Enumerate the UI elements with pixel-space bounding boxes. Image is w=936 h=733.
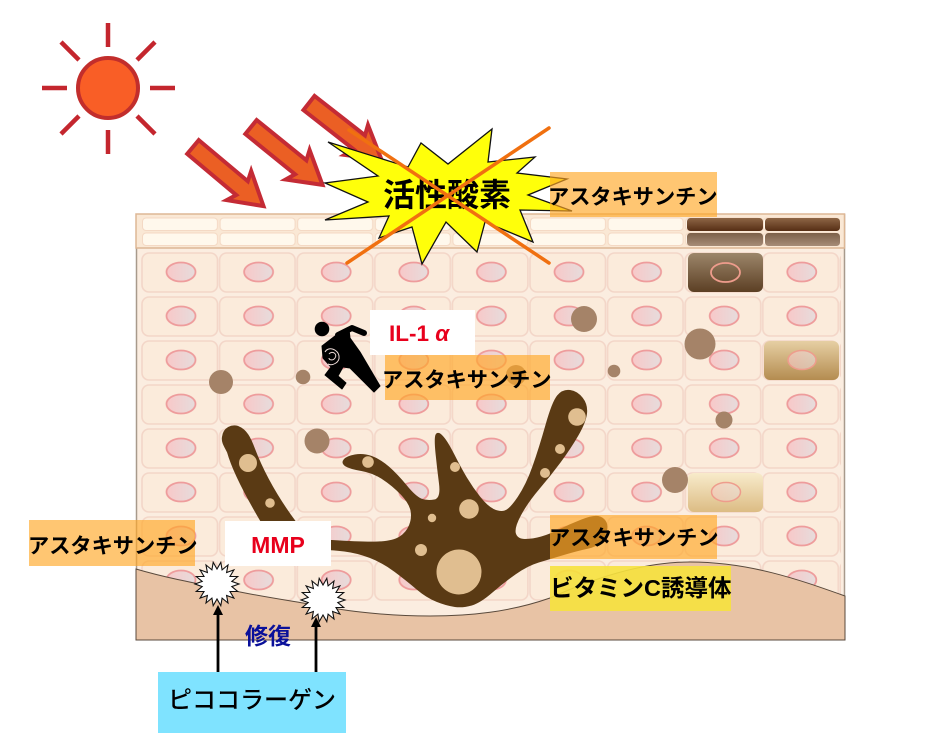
cell grid (141, 252, 841, 604)
label: astaxanthin (right): アスタキサンチン (549, 526, 719, 550)
melanin granules (239, 408, 586, 594)
heading: reactive oxygen: 活性酸素 (383, 177, 511, 213)
label: vitamin C derivative: ビタミンC誘導体 (550, 575, 732, 601)
box: picocollagen (158, 672, 346, 733)
melanocyte (223, 391, 606, 606)
label: astaxanthin (top): アスタキサンチン (548, 185, 718, 209)
icon: damage burst 1 (195, 562, 239, 606)
panel: skin cross-section (136, 214, 844, 640)
label: astaxanthin (right) (549, 515, 719, 559)
arrow: UV ray 3 (297, 88, 393, 175)
label: repair: 修復 (245, 623, 291, 649)
icon: running figure (315, 322, 380, 392)
label: IL-1 alpha (370, 310, 475, 355)
icon: sun (42, 23, 175, 154)
arrow: repair right (311, 617, 321, 672)
icon: damage burst 2 (301, 578, 345, 622)
label: MMP (225, 521, 331, 566)
label: MMP: MMP (251, 532, 305, 558)
label: astaxanthin (middle): アスタキサンチン (382, 368, 552, 392)
label: IL-1 alpha: IL-1 α (389, 321, 450, 346)
pigmented light cell (688, 473, 763, 512)
pigmented top cells (687, 218, 840, 246)
epidermis top layer (142, 217, 840, 247)
label: astaxanthin (top) (548, 172, 718, 217)
label: astaxanthin (left): アスタキサンチン (28, 534, 198, 558)
melanin spots (209, 306, 732, 493)
cross mark over reactive oxygen (347, 128, 549, 263)
arrow: UV ray 1 (181, 132, 276, 221)
arrow: UV ray 2 (239, 112, 334, 200)
label: astaxanthin (left) (28, 520, 198, 566)
label: astaxanthin (middle) (382, 355, 552, 400)
starburst: reactive oxygen (325, 129, 572, 264)
box: picocollagen: ピココラーゲン (168, 687, 336, 714)
melanocyte left dendrite (223, 426, 295, 522)
melanocyte body (325, 391, 606, 606)
pigmented dark cell (688, 253, 763, 292)
arrow: repair left (213, 605, 223, 672)
pigmented medium cell (764, 341, 839, 380)
label: vitamin C derivative (550, 566, 732, 611)
dermis layer (136, 562, 845, 640)
